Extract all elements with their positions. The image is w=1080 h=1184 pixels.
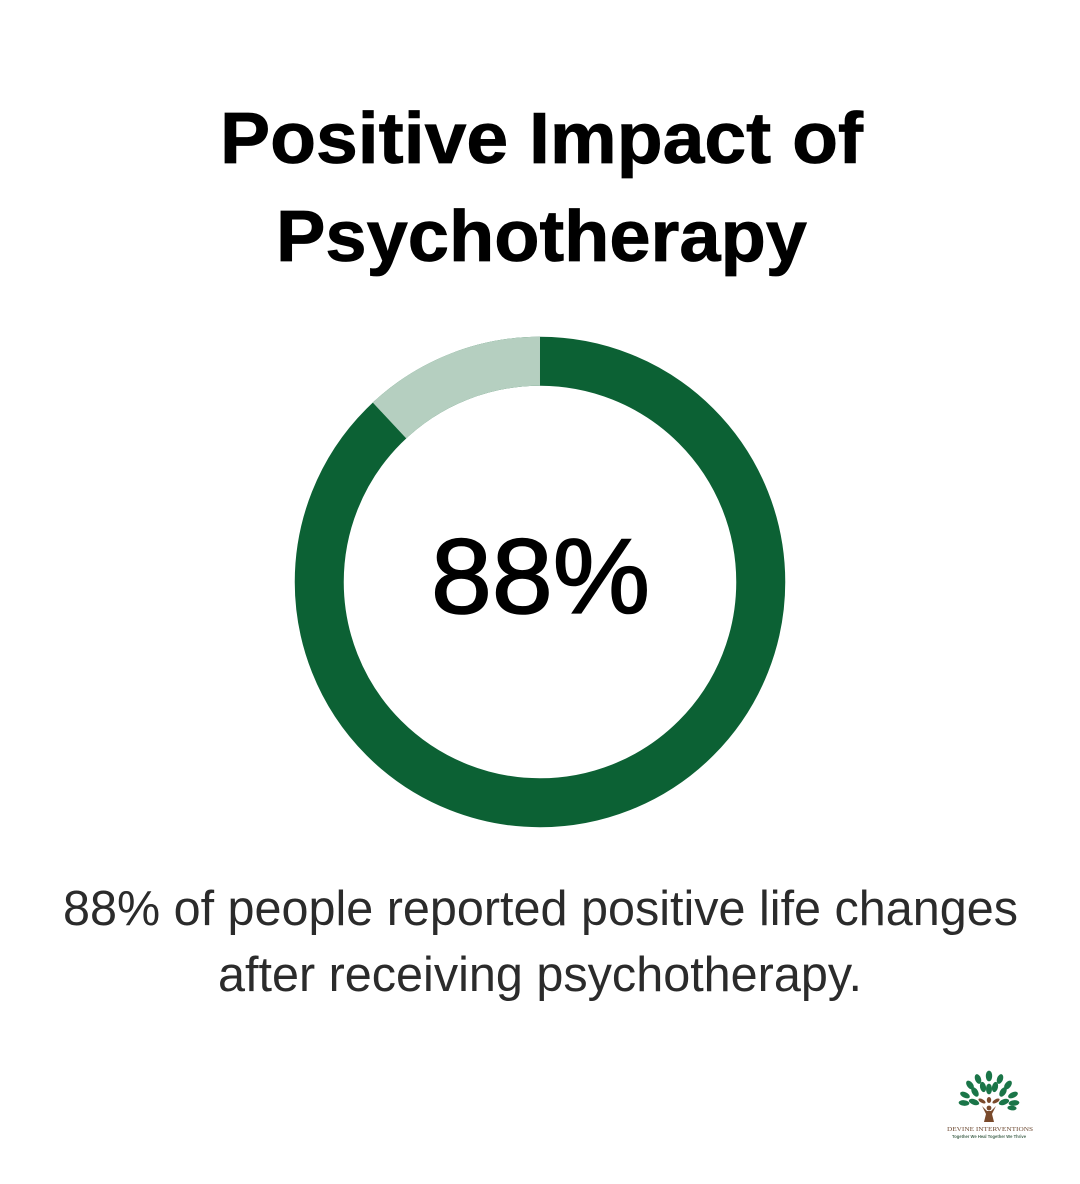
title xyxy=(220,99,864,277)
center value: 88% xyxy=(431,516,650,636)
icon: tree leaves xyxy=(958,1071,1020,1111)
title: Positive Impact of xyxy=(220,99,864,179)
description: 88% of people reported positive life changes xyxy=(63,882,1018,936)
logo name: DEVINE INTERVENTIONS xyxy=(947,1126,1033,1133)
description xyxy=(63,882,1018,1002)
remaining 12% segment xyxy=(390,361,540,420)
description: after receiving psychotherapy. xyxy=(218,948,862,1002)
logo tagline: Together We Heal Together We Thrive xyxy=(952,1134,1026,1139)
title: Psychotherapy xyxy=(276,197,807,277)
logo: Devine Interventions xyxy=(947,1071,1033,1139)
icon: tree figure xyxy=(978,1097,1000,1122)
donut chart: 88% xyxy=(319,361,761,803)
